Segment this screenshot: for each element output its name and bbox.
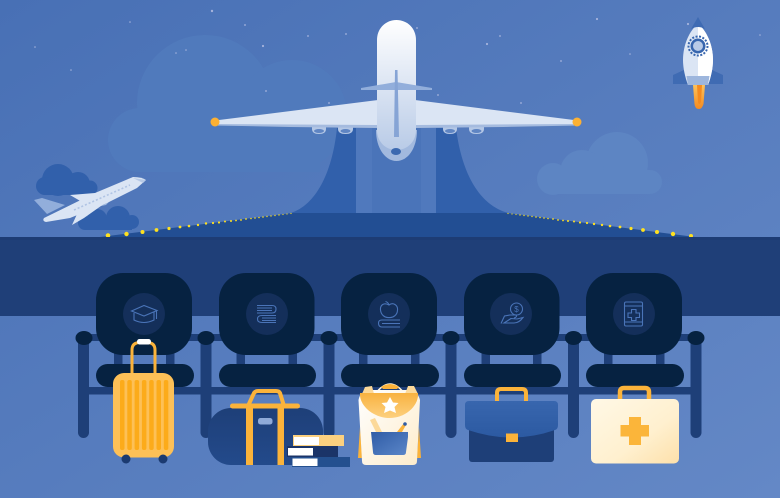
- backpack side pockets: [358, 427, 421, 458]
- first aid kit: [591, 388, 679, 464]
- terminal wall band: [0, 237, 780, 316]
- suitcase body: [113, 373, 174, 458]
- wing tip lights: [210, 118, 220, 126]
- briefcase body: [469, 420, 554, 462]
- seat 2: [219, 273, 316, 387]
- seat 1: [96, 273, 194, 387]
- icon: apple and book: [378, 302, 400, 327]
- suitcase handle: [132, 342, 155, 374]
- seat 5: [586, 273, 684, 387]
- first aid kit body: [591, 399, 679, 464]
- small plane taking off: [34, 177, 146, 225]
- nose wheel well: [391, 148, 401, 155]
- stack of books: [287, 435, 350, 467]
- rocket fins: [673, 70, 723, 84]
- icon: tablet with medical cross: [624, 302, 642, 326]
- engine exhaust trails: [291, 128, 508, 213]
- rocket body: [683, 24, 713, 85]
- briefcase clasp: [506, 434, 518, 442]
- backpack body: [358, 390, 420, 465]
- rocket flame: [693, 85, 705, 109]
- large background cloud: [108, 35, 347, 172]
- runway lights right: [507, 213, 693, 238]
- suitcase wheels: [122, 454, 130, 464]
- bench frame: [76, 331, 704, 438]
- backpack pocket: [371, 432, 408, 455]
- backpack top loop: [376, 384, 404, 393]
- tailplane and fin: [361, 82, 432, 90]
- first aid kit handle: [620, 388, 649, 402]
- seat 4: [464, 273, 561, 387]
- runway lights left: [106, 213, 292, 238]
- seat 4: $: [514, 305, 519, 314]
- briefcase flap: [465, 401, 558, 438]
- duffel body: [208, 408, 323, 465]
- backpack straps: [362, 386, 418, 394]
- large plane: [210, 20, 582, 161]
- backpack: [358, 384, 421, 465]
- backpack pencils: [370, 418, 382, 432]
- suitcase: [113, 339, 174, 464]
- briefcase: [465, 389, 558, 462]
- duffel handle: [248, 391, 284, 406]
- icon: hand with dollar coin: [501, 303, 523, 324]
- runway: [0, 213, 780, 240]
- icon: books: [257, 306, 276, 322]
- first aid cross: [620, 417, 649, 445]
- briefcase handle: [497, 389, 526, 403]
- left clouds: [36, 164, 139, 230]
- rocket porthole gear: [688, 36, 708, 56]
- backpack flap: [360, 393, 418, 418]
- duffel bag: [208, 391, 323, 465]
- rocket: [673, 17, 723, 109]
- engines: [312, 127, 484, 134]
- wings: [215, 100, 578, 128]
- icon: graduation cap: [132, 306, 157, 322]
- stars: [34, 10, 761, 104]
- right background cloud: [537, 132, 662, 195]
- seat 3: [341, 273, 439, 387]
- fuselage: [376, 130, 417, 161]
